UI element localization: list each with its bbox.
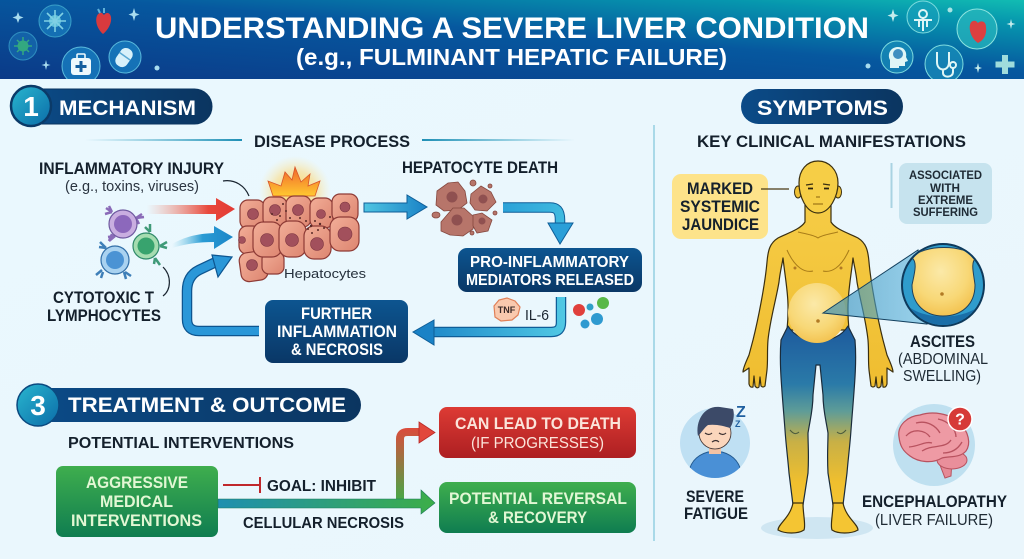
- box: can lead to death: (IF PROGRESSES): [471, 435, 604, 452]
- box: can lead to death: [439, 407, 636, 458]
- icons: header left: [9, 5, 160, 85]
- icon: brain: [893, 404, 975, 486]
- body: legs and shorts: [780, 326, 856, 505]
- box: further inflammation: [265, 300, 408, 363]
- icon: dying hepatocytes: [432, 180, 497, 236]
- arrow: to hepatocyte death: [364, 195, 427, 219]
- figure: human body: [743, 161, 893, 539]
- box: further inflammation: & NECROSIS: [291, 341, 383, 359]
- label: severe fatigue: SEVERE: [686, 488, 744, 506]
- heading: mechanism: MECHANISM: [59, 96, 196, 120]
- arrow: to mediators: [503, 208, 573, 244]
- box: further inflammation: FURTHER: [301, 305, 372, 323]
- heading: symptoms: [741, 89, 903, 124]
- label: ascites: SWELLING): [903, 368, 981, 385]
- panel: mechanism: [11, 86, 642, 363]
- magnifier: ascites: [823, 244, 984, 330]
- heading: mechanism: 1: [23, 91, 39, 122]
- label: encephalopathy: [862, 493, 1007, 529]
- heading: symptoms: SYMPTOMS: [757, 96, 888, 120]
- label: hepatocyte death: HEPATOCYTE DEATH: [402, 159, 558, 177]
- box: potential reversal: & RECOVERY: [488, 509, 587, 527]
- arrow: to further inflammation: [413, 297, 561, 345]
- heading: treatment: 3: [30, 390, 46, 421]
- panel: treatment and outcome: [17, 384, 636, 537]
- box: potential reversal: [439, 482, 636, 533]
- subheading: key clinical manifestations: KEY CLINICAL MANIFESTATIONS: [697, 132, 966, 151]
- callout: extreme suffering: SUFFERING: [913, 205, 978, 219]
- box: further inflammation: INFLAMMATION: [277, 323, 397, 341]
- icon: fatigued person: Z: [735, 419, 741, 429]
- label: severe fatigue: [684, 488, 748, 523]
- label: goal inhibit: GOAL: INHIBIT: [267, 478, 377, 495]
- label: ascites: ASCITES: [910, 333, 975, 351]
- box: pro-inflammatory mediators: PRO-INFLAMMATORY: [470, 254, 629, 271]
- icon: fatigued person: Z: [736, 404, 746, 421]
- label: cytotoxic T lymphocytes: [47, 267, 169, 325]
- body: abdomen: [788, 283, 846, 343]
- box: can lead to death: CAN LEAD TO DEATH: [455, 415, 621, 433]
- heading: treatment: TREATMENT & OUTCOME: [68, 393, 346, 417]
- icon: TNF badge: TNF: [498, 305, 516, 315]
- icon: cytotoxic T cells: [96, 206, 167, 279]
- callout: jaundice: [672, 174, 789, 239]
- box: pro-inflammatory mediators: MEDIATORS RELEASED: [466, 272, 634, 289]
- label: potential interventions: POTENTIAL INTERVENTIONS: [68, 435, 294, 452]
- heading: mechanism: [11, 86, 212, 126]
- heading: treatment: [17, 384, 361, 426]
- label: IL-6: IL-6: [525, 307, 549, 324]
- callout: extreme suffering: [890, 163, 992, 224]
- arrow: injury red: [147, 198, 235, 221]
- box: aggressive medical interventions: [56, 466, 218, 537]
- header banner: [0, 0, 1024, 85]
- callout: extreme suffering: EXTREME: [918, 193, 973, 207]
- icon: TNF badge: [494, 298, 520, 321]
- arrow: T cell attack blue: [172, 226, 233, 249]
- subheading: disease process: DISEASE PROCESS: [254, 132, 410, 151]
- label: encephalopathy: (LIVER FAILURE): [875, 512, 993, 529]
- panel: symptoms: [672, 89, 1007, 539]
- label: inflammatory injury: INFLAMMATORY INJURY: [39, 160, 224, 178]
- arrow: to recovery: [218, 490, 435, 514]
- icon: fatigued person: [680, 404, 750, 480]
- box: potential reversal: POTENTIAL REVERSAL: [449, 490, 627, 508]
- icon: brain: ?: [955, 412, 965, 428]
- arrow: feedback to hepatocytes: [187, 255, 259, 331]
- title: UNDERSTANDING A SEVERE LIVER CONDITION: [155, 12, 869, 45]
- callout: jaundice: SYSTEMIC: [680, 198, 760, 216]
- icon: hepatocytes cluster: [238, 156, 359, 283]
- label: inflammatory injury: (e.g., toxins, viruses): [65, 179, 199, 195]
- label: ascites: [898, 333, 988, 385]
- label: cytotoxic T lymphocytes: LYMPHOCYTES: [47, 307, 161, 325]
- box: aggressive medical interventions: MEDICAL: [100, 493, 173, 511]
- label: hepatocytes: Hepatocytes: [284, 266, 367, 281]
- icons: header right: [866, 1, 1016, 83]
- label: cellular necrosis: CELLULAR NECROSIS: [243, 515, 404, 532]
- callout: jaundice: JAUNDICE: [682, 216, 759, 234]
- label: ascites: (ABDOMINAL: [898, 351, 988, 368]
- subtitle: (e.g., FULMINANT HEPATIC FAILURE): [296, 44, 727, 70]
- label: cytotoxic T lymphocytes: CYTOTOXIC T: [53, 289, 154, 307]
- callout: jaundice: MARKED: [687, 180, 753, 198]
- section divider: [653, 125, 655, 541]
- box: pro-inflammatory mediators: [458, 248, 642, 292]
- label: severe fatigue: FATIGUE: [684, 505, 748, 523]
- body: head: [794, 186, 802, 198]
- icon: inhibit bar: [223, 477, 260, 493]
- arrow: to death: [400, 422, 435, 500]
- label: encephalopathy: ENCEPHALOPATHY: [862, 493, 1007, 511]
- callout: extreme suffering: WITH: [930, 181, 960, 195]
- label: inflammatory injury: [39, 160, 249, 196]
- callout: extreme suffering: ASSOCIATED: [909, 168, 982, 182]
- icon: cytokine dots: [573, 297, 609, 328]
- box: aggressive medical interventions: INTERVENTIONS: [71, 512, 202, 530]
- box: aggressive medical interventions: AGGRESSIVE: [86, 474, 188, 492]
